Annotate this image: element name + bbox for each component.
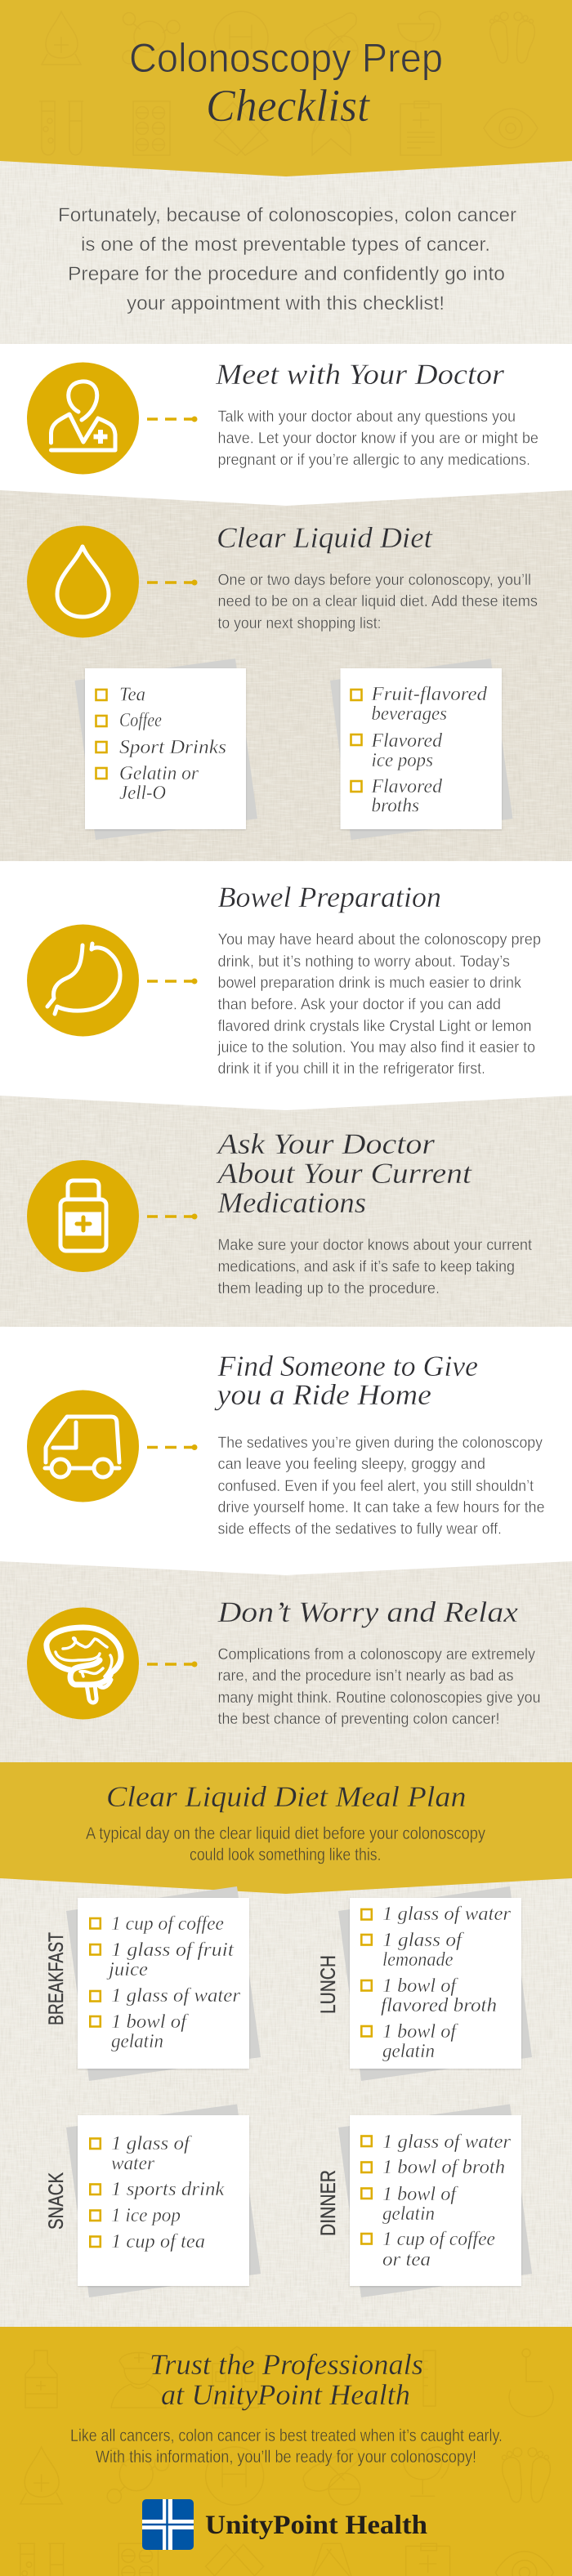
checklist <box>361 1904 512 2062</box>
note: shopping list one: Tea <box>119 685 145 706</box>
subheading: A typical day on the clear liquid diet before your colonoscopy <box>86 1824 485 1843</box>
checklist: gelatin <box>382 2203 435 2225</box>
body text: than before. Ask your doctor if you can add <box>217 995 501 1013</box>
body text: have. Let your doctor know if you are or might be <box>217 430 538 448</box>
intro text: Prepare for the procedure and confidently go into <box>68 263 505 285</box>
checklist: lemonade <box>382 1949 454 1971</box>
checklist: 1 glass of water <box>382 1904 512 1925</box>
checklist: 1 ice pop <box>111 2205 181 2226</box>
body text: pregnant or if you’re allergic to any medications. <box>217 451 530 469</box>
body text: flavored drink crystals like Crystal Light or lemon <box>217 1017 531 1035</box>
note: shopping list two: broths <box>371 796 419 817</box>
panel: find someone to give you a ride home <box>0 1327 572 1575</box>
checklist: 1 glass of water <box>382 2132 512 2153</box>
heading: Trust the Professionals <box>150 2348 423 2381</box>
body text: them leading up to the procedure. <box>217 1279 440 1297</box>
body text: drive yourself home. It can take a few hours for the <box>217 1498 544 1516</box>
panel: clear liquid diet <box>27 521 538 840</box>
heading: Find Someone to Give <box>217 1350 478 1382</box>
panel: ask your doctor about medications <box>27 1127 533 1297</box>
label: DINNER <box>317 2170 340 2236</box>
heading <box>150 2348 423 2411</box>
label: LUNCH <box>317 1955 340 2014</box>
checklist: juice <box>106 1959 148 1980</box>
header band <box>0 0 572 176</box>
header icon pattern <box>39 11 538 155</box>
body text: juice to the solution. You may also find it easier to <box>217 1038 535 1056</box>
body text <box>217 1434 544 1538</box>
checklist <box>361 2132 512 2270</box>
checklist: gelatin <box>382 2041 435 2062</box>
meal card: breakfast <box>45 1886 261 2081</box>
arrow <box>147 1215 194 1218</box>
note: shopping list one: Gelatin or <box>119 763 199 784</box>
checklist: 1 bowl of <box>382 1976 458 1997</box>
body text: confused. Even if you feel alert, you still shouldn’t <box>217 1477 534 1495</box>
heading: Bowel Preparation <box>217 881 441 913</box>
checklist: 1 cup of coffee <box>111 1913 224 1935</box>
icon: doctor <box>27 363 139 474</box>
body text: medications, and ask if it’s safe to keep taking <box>217 1258 515 1276</box>
note: shopping list two: Flavored <box>371 730 443 752</box>
body text <box>217 1645 541 1728</box>
checklist: 1 cup of tea <box>111 2231 205 2252</box>
heading: Clear Liquid Diet <box>217 521 433 554</box>
body text: The sedatives you’re given during the colonoscopy <box>217 1434 543 1452</box>
note: shopping list one: Sport Drinks <box>119 737 226 758</box>
title: Colonoscopy Prep <box>129 35 443 81</box>
body text: Talk with your doctor about any questions you <box>217 408 516 426</box>
label: BREAKFAST <box>45 1932 68 2025</box>
heading <box>216 1127 472 1219</box>
icon: water drop <box>27 526 139 637</box>
note: shopping list two: Fruit-flavored <box>370 684 488 705</box>
body text: Complications from a colonoscopy are extremely <box>217 1645 535 1663</box>
panel: section backgrounds beige <box>0 482 572 1765</box>
panel: don't worry and relax <box>27 1596 541 1728</box>
checklist <box>90 1913 241 2052</box>
body text: side effects of the sedatives to fully wear off. <box>217 1520 502 1538</box>
panel: bowel preparation <box>0 861 572 1110</box>
logo <box>142 2499 427 2550</box>
icon: medicine bottle <box>27 1160 139 1272</box>
note: shopping list two: Flavored <box>371 776 443 797</box>
heading: Medications <box>217 1186 366 1219</box>
checklist: 1 bowl of <box>382 2184 458 2205</box>
intro text: Fortunately, because of colonoscopies, colon cancer <box>58 204 516 226</box>
heading: you a Ride Home <box>214 1378 431 1411</box>
body text: One or two days before your colonoscopy, you’ll <box>217 571 531 589</box>
checklist: gelatin <box>111 2031 163 2052</box>
meal card: lunch <box>317 1886 532 2081</box>
arrow <box>147 1446 194 1449</box>
checklist <box>90 2133 225 2252</box>
body text: can leave you feeling sleepy, groggy and <box>217 1455 485 1473</box>
checklist: 1 glass of water <box>111 1985 241 2007</box>
checklist: 1 bowl of <box>111 2011 189 2033</box>
panel: meal plan header <box>0 1762 572 1894</box>
arrow <box>147 1663 194 1666</box>
checklist: or tea <box>382 2249 431 2270</box>
intro text: is one of the most preventable types of cancer. <box>81 234 490 256</box>
body text <box>217 408 538 469</box>
body text: Make sure your doctor knows about your current <box>217 1236 533 1254</box>
meal card: snack <box>45 2105 261 2297</box>
icon: brain <box>27 1608 139 1719</box>
heading: Clear Liquid Diet Meal Plan <box>106 1780 466 1813</box>
footer icon pattern <box>25 2346 553 2417</box>
label: SNACK <box>45 2172 68 2230</box>
body text: Like all cancers, colon cancer is best treated when it’s caught early. <box>70 2426 503 2445</box>
body text: bowel preparation drink is much easier to drink <box>217 974 521 992</box>
body text <box>217 571 538 632</box>
body text: drink, but it’s nothing to worry about. Today’s <box>217 953 510 971</box>
heading: Ask Your Doctor <box>216 1127 436 1160</box>
subheading <box>86 1824 485 1864</box>
note: shopping list two: ice pops <box>371 750 433 771</box>
title script: Checklist <box>206 81 370 132</box>
note: shopping list two <box>330 659 513 840</box>
note: shopping list one: Jell-O <box>119 783 166 804</box>
body text: to your next shopping list: <box>217 614 381 632</box>
checklist: flavored broth <box>381 1995 497 2016</box>
body text: With this information, you’ll be ready for your colonoscopy! <box>96 2448 476 2467</box>
panel: meet with your doctor <box>0 344 572 506</box>
logo: UnityPoint Health <box>205 2511 427 2540</box>
icon: truck <box>27 1391 139 1502</box>
panel: footer <box>0 2327 572 2576</box>
body text: drink it if you chill it in the refrigerator first. <box>217 1060 485 1078</box>
icon: stomach <box>27 925 139 1036</box>
body text: rare, and the procedure isn’t nearly as bad as <box>217 1667 514 1685</box>
checklist: 1 sports drink <box>111 2179 225 2200</box>
arrow <box>147 581 194 584</box>
heading <box>214 1350 478 1411</box>
heading: at UnityPoint Health <box>161 2378 410 2411</box>
body text: You may have heard about the colonoscopy prep <box>217 931 541 949</box>
intro text <box>58 204 516 315</box>
checklist: 1 bowl of broth <box>382 2157 505 2178</box>
body text: need to be on a clear liquid diet. Add these items <box>217 592 538 610</box>
checklist: 1 glass of <box>111 2133 192 2154</box>
checklist: 1 glass of <box>382 1930 465 1951</box>
note: shopping list two: beverages <box>371 703 447 725</box>
heading: About Your Current <box>216 1157 472 1190</box>
body text: the best chance of preventing colon cancer! <box>217 1710 500 1728</box>
note: shopping list one <box>75 659 257 840</box>
heading: Meet with Your Doctor <box>215 358 505 391</box>
footer icon pattern lower <box>18 2447 553 2576</box>
body text <box>217 1236 533 1297</box>
intro text: your appointment with this checklist! <box>127 292 445 315</box>
checklist: water <box>111 2154 155 2175</box>
body text <box>70 2426 503 2467</box>
checklist: 1 glass of fruit <box>111 1940 235 1961</box>
checklist: 1 cup of coffee <box>382 2229 495 2250</box>
arrow <box>147 417 194 421</box>
checklist: 1 bowl of <box>382 2021 458 2042</box>
arrow <box>147 980 194 983</box>
meal card: dinner <box>317 2105 532 2297</box>
body text <box>217 931 541 1078</box>
subheading: could look something like this. <box>190 1846 381 1864</box>
heading: Don’t Worry and Relax <box>217 1596 518 1628</box>
body text: many might think. Routine colonoscopies give you <box>217 1689 541 1707</box>
note: shopping list one: Coffee <box>119 710 162 731</box>
